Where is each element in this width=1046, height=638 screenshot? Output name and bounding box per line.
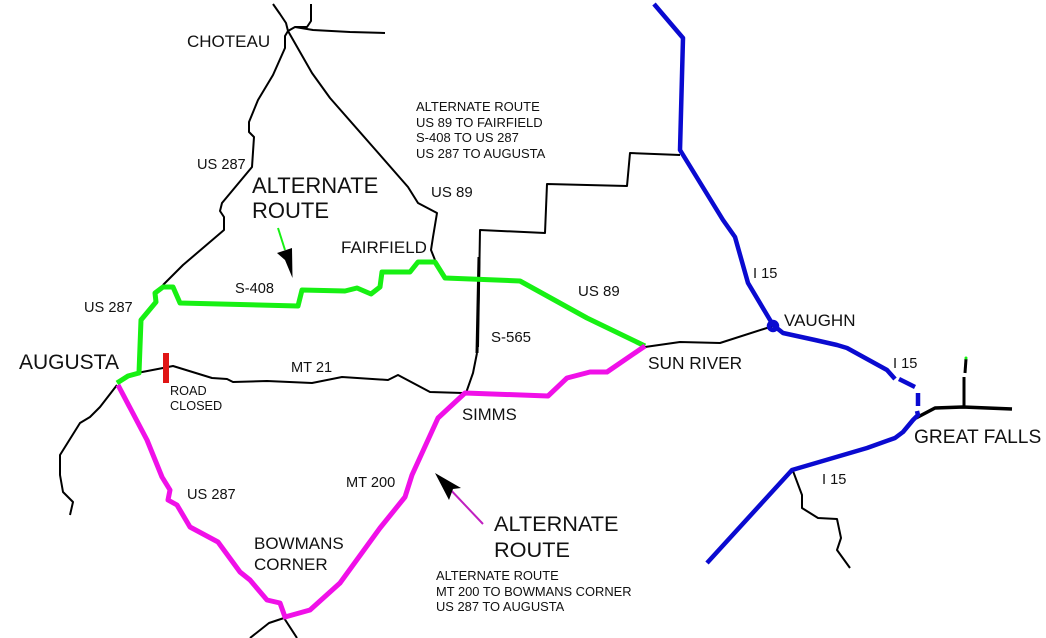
road labels: US 287 <box>197 157 246 173</box>
green arrow <box>277 228 292 278</box>
road labels: I 15 <box>893 356 917 372</box>
town labels <box>254 238 855 574</box>
road labels: MT 21 <box>291 360 332 376</box>
blue interstate route <box>654 4 918 563</box>
north route description: US 89 TO FAIRFIELD <box>416 115 543 130</box>
town labels: SIMMS <box>462 405 517 424</box>
town labels: CORNER <box>254 555 328 574</box>
road closed label: ROAD <box>170 384 207 398</box>
alternate route heading south: ROUTE <box>494 537 570 562</box>
alternate route heading south: ALTERNATE <box>494 511 619 536</box>
south route description: US 287 TO AUGUSTA <box>436 599 565 614</box>
great falls label: GREAT FALLS <box>914 427 1041 448</box>
road closed label: CLOSED <box>170 399 222 413</box>
north route description: ALTERNATE ROUTE <box>416 99 540 114</box>
north route description: US 287 TO AUGUSTA <box>416 146 546 161</box>
alternate route heading north: ROUTE <box>252 198 329 223</box>
green dot at road end <box>964 356 968 360</box>
magenta alternate route <box>118 346 645 617</box>
road labels: US 89 <box>431 184 473 201</box>
town labels: FAIRFIELD <box>341 238 427 257</box>
choteau label: CHOTEAU <box>187 32 270 51</box>
town labels: SUN RIVER <box>648 353 742 373</box>
road closed marker <box>163 353 169 383</box>
magenta arrow <box>435 473 483 524</box>
road labels: MT 200 <box>346 475 395 491</box>
road labels: US 89 <box>578 283 620 300</box>
road labels: US 287 <box>84 300 133 316</box>
town labels: BOWMANS <box>254 534 344 553</box>
north route description: S-408 TO US 287 <box>416 130 519 145</box>
road labels: S-565 <box>491 329 531 346</box>
south route description: MT 200 TO BOWMANS CORNER <box>436 584 632 599</box>
road labels: US 287 <box>187 487 236 503</box>
green alternate route <box>117 262 645 383</box>
road labels: S-408 <box>235 281 274 297</box>
town labels: VAUGHN <box>784 311 855 330</box>
alternate route heading north: ALTERNATE <box>252 173 378 198</box>
road labels <box>84 157 917 503</box>
road labels: I 15 <box>753 266 777 282</box>
augusta label: AUGUSTA <box>19 351 119 374</box>
south route description: ALTERNATE ROUTE <box>436 568 559 583</box>
road labels: I 15 <box>822 472 846 488</box>
